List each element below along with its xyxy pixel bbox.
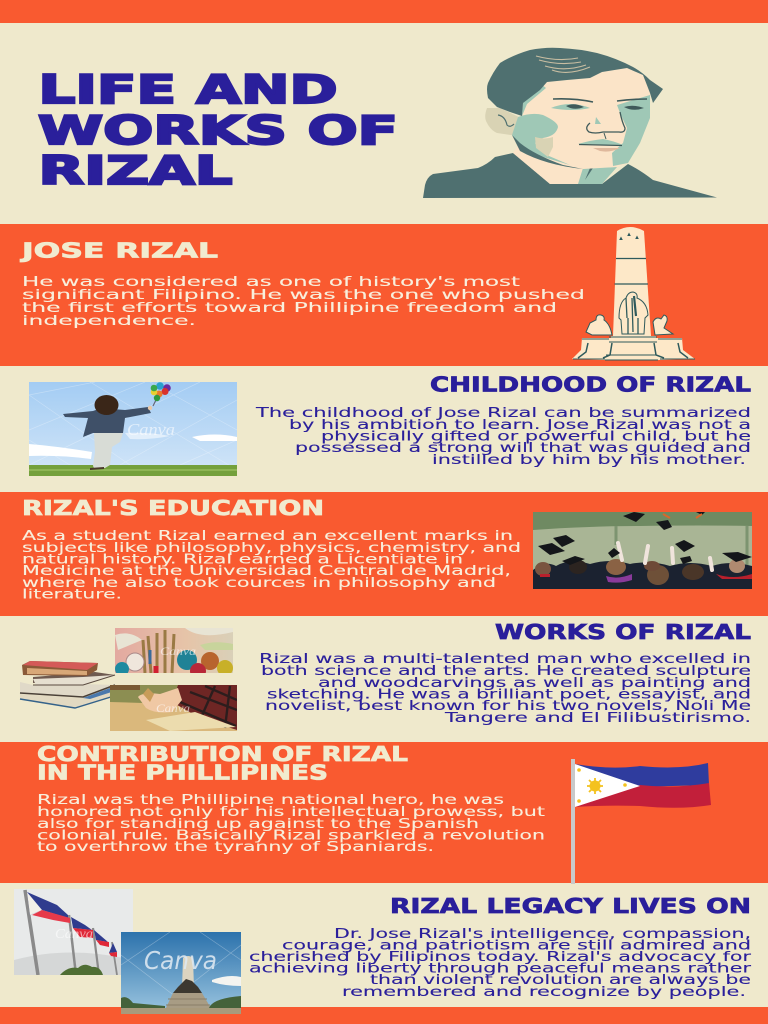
text block: legacy: [249, 927, 752, 1000]
photo: stack of books: [20, 661, 127, 708]
photo: boy with pinwheel: [29, 382, 237, 476]
text block: education: Medicine at the Universidad Central de Madrid,: [22, 564, 511, 579]
panel: header: [0, 23, 768, 223]
text block: Jose Rizal: independence.: [22, 314, 196, 329]
title: RIZAL: [38, 148, 232, 194]
watermark: Canva: [160, 644, 196, 658]
text block: legacy: courage, and patriotism are still admired and: [282, 938, 751, 954]
text block: works: novelist, best known for his two novels, Noli Me: [265, 699, 751, 714]
heading: childhood: CHILDHOOD OF RIZAL: [430, 372, 751, 396]
text block: contribution: [37, 793, 545, 855]
heading: legacy: RIZAL LEGACY LIVES ON: [390, 894, 751, 918]
text block: works: [259, 652, 751, 726]
text block: childhood: by his ambition to learn. Jose Rizal was not a: [289, 418, 751, 433]
text block: childhood: physically gifted or powerful child, but he: [321, 430, 751, 444]
title: LIFE AND: [38, 67, 338, 113]
text block: works: Tangere and El Filibustirismo.: [443, 711, 751, 726]
watermark: Canva: [55, 927, 93, 942]
text block: works: and woodcarvings as well as painting and: [318, 676, 751, 691]
text block: contribution: honored not only for his intellectual prowess, but: [37, 805, 545, 820]
title: [38, 67, 398, 194]
bottom band: [0, 1007, 768, 1024]
text block: legacy: than violent revolution are always be: [370, 973, 751, 988]
heading: Jose Rizal: JOSE RIZAL: [19, 238, 218, 262]
panel: Jose Rizal: [0, 224, 768, 366]
text block: legacy: cherished by Filipinos today. Rizal's advocacy for: [249, 950, 752, 965]
text block: contribution: Rizal was the Phillipine national hero, he was: [37, 793, 504, 808]
text block: Jose Rizal: the first efforts toward Phillipine freedom and: [22, 301, 557, 316]
icon: portrait of Jose Rizal: [423, 48, 717, 198]
text block: Jose Rizal: significant Filipino. He was the one who pushed: [22, 288, 585, 303]
heading: contribution: IN THE PHILLIPINES: [37, 760, 328, 784]
watermark: Canva: [127, 420, 175, 439]
icon: Philippine flag on pole: [571, 759, 711, 884]
photo: woodcarving: [110, 685, 237, 731]
heading: contribution: [37, 742, 408, 784]
text block: works: Rizal was a multi-talented man who excelled in: [259, 652, 751, 667]
text block: contribution: to overthrow the tyranny of Spaniards.: [37, 840, 434, 855]
text block: education: literature.: [22, 588, 122, 602]
heading: contribution: CONTRIBUTION OF RIZAL: [37, 742, 408, 766]
text block: education: As a student Rizal earned an excellent marks in: [22, 529, 513, 544]
photo: paint and brushes: [115, 628, 233, 673]
photo: graduation caps: [533, 512, 752, 589]
text block: education: where he also took cources in philosophy and: [22, 576, 496, 591]
panel: education: [0, 492, 768, 616]
text block: childhood: The childhood of Jose Rizal can be summarized: [254, 406, 751, 421]
panel: works: [20, 623, 751, 731]
icon: Rizal monument: [572, 227, 695, 360]
heading: works: WORKS OF RIZAL: [495, 620, 751, 644]
panel: childhood: [29, 376, 751, 476]
heading: education: RIZAL'S EDUCATION: [22, 496, 324, 520]
text block: childhood: [254, 406, 751, 468]
text block: works: both science and the arts. He created sculpture: [261, 664, 751, 679]
photo: row of flags: [14, 889, 133, 975]
text block: education: subjects like philosophy, physics, chemistry, and: [22, 541, 521, 556]
text block: contribution: colonial rule. Basically Rizal sparkled a revolution: [37, 828, 545, 844]
text block: works: sketching. He was a brilliant poet, essayist, and: [267, 688, 751, 702]
text block: Jose Rizal: [22, 275, 585, 329]
panel: legacy: [0, 884, 768, 1014]
top band: [0, 0, 768, 23]
panel: contribution: [0, 742, 768, 884]
text block: legacy: achieving liberty through peaceful means rather: [249, 962, 752, 976]
photo: Rizal monument and sky: [121, 932, 241, 1014]
text block: contribution: also for standing up against to the Spanish: [37, 817, 479, 832]
text block: childhood: instilled by him by his mother.: [432, 453, 746, 468]
text block: education: natural history. Rizal earned a Licentiate in: [22, 552, 463, 568]
watermark: Canva: [144, 946, 217, 975]
title: WORKS OF: [38, 108, 398, 154]
text block: education: [22, 529, 521, 602]
text block: Jose Rizal: He was considered as one of history's most: [22, 275, 520, 290]
text block: legacy: Dr. Jose Rizal's intelligence, compassion,: [334, 927, 751, 942]
watermark: Canva: [156, 701, 190, 715]
text block: childhood: possessed a strong will that was guided and: [295, 441, 751, 456]
text block: legacy: remembered and recognize by people.: [342, 985, 746, 1000]
